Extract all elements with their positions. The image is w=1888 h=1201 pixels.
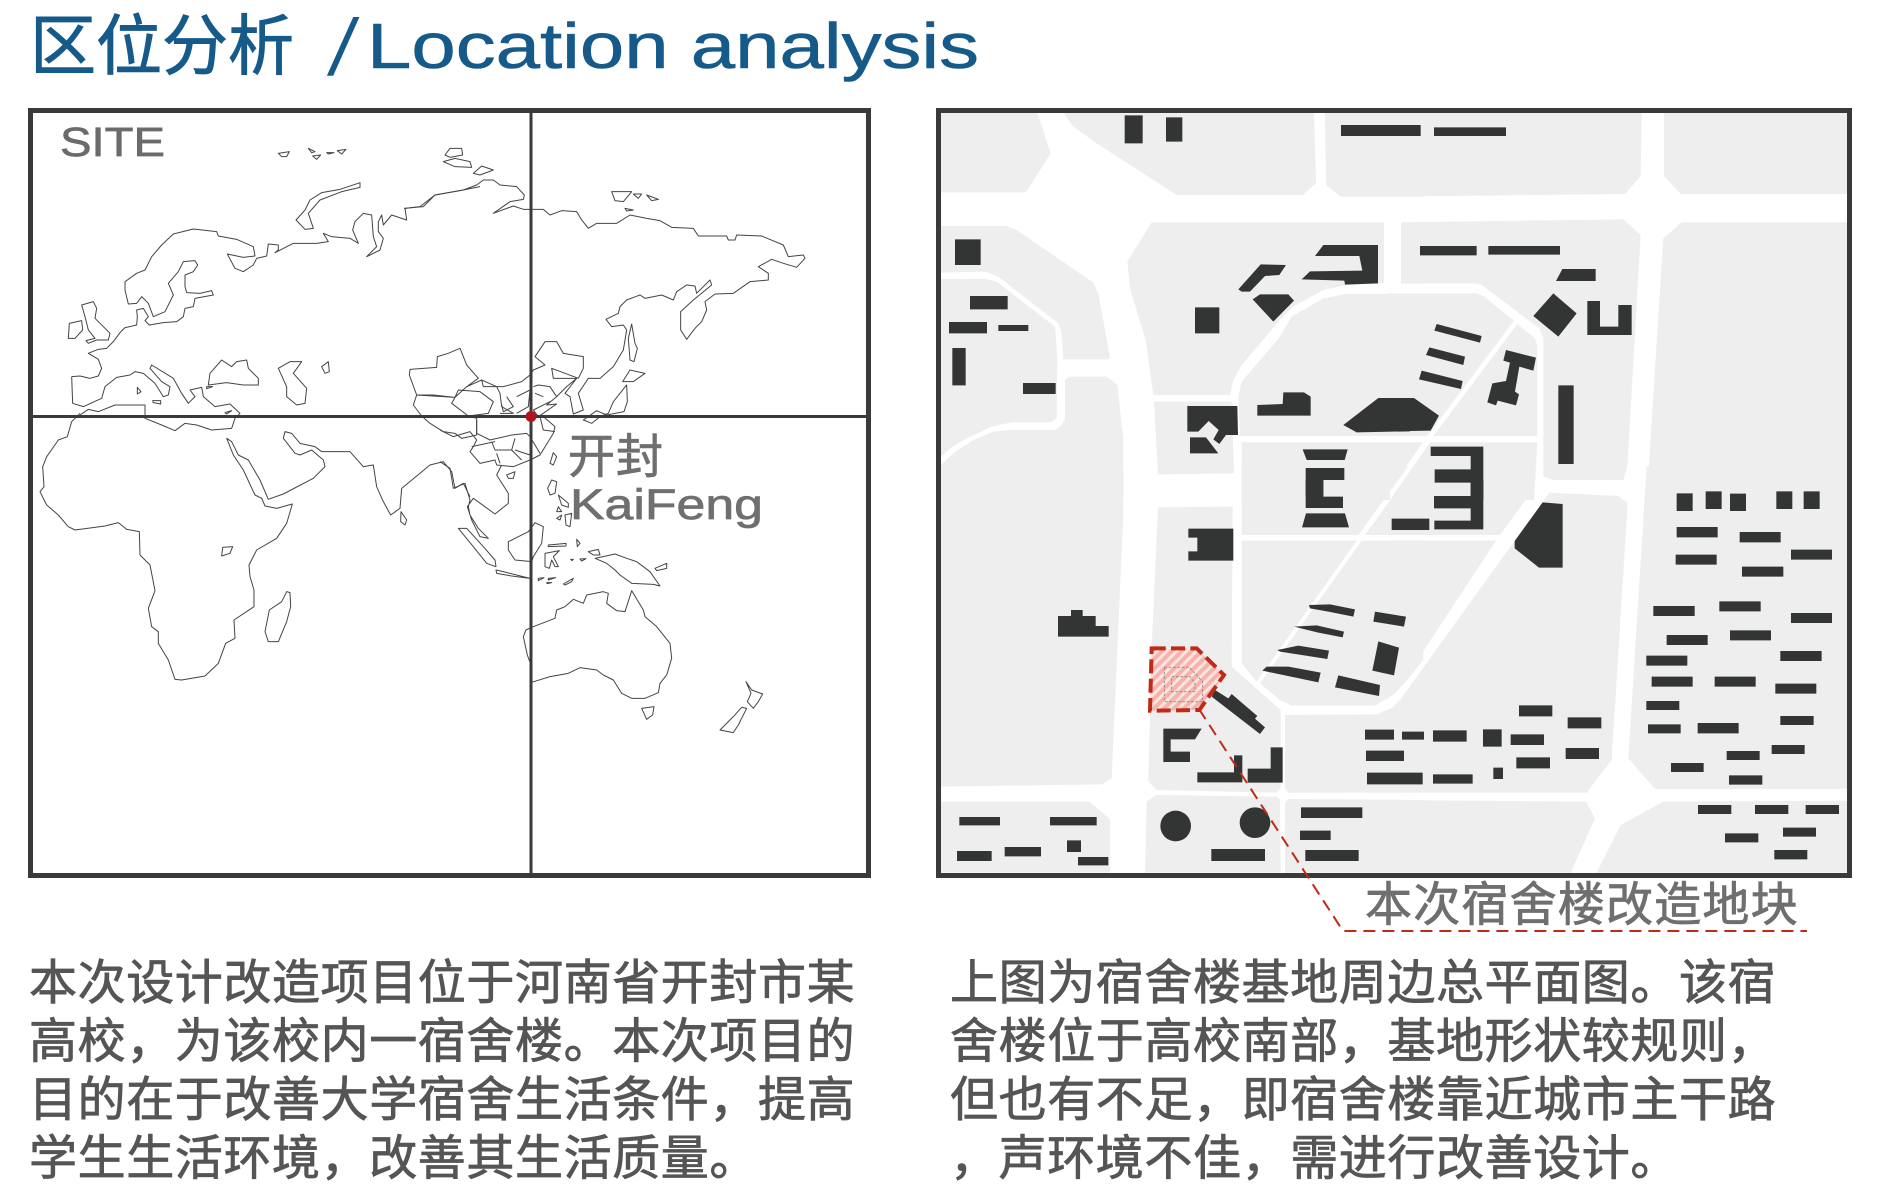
text block: site description: 舍楼位于高校南部，基地形状较规则， (950, 1016, 1776, 1068)
site label: 本次宿舍楼改造地块 (1365, 878, 1799, 931)
crosshair lines (30, 110, 869, 876)
site plan blocks and buildings (941, 113, 1847, 873)
text block: project description (29, 957, 855, 1186)
title: 区位分析 (30, 9, 294, 83)
world map outline (40, 148, 805, 733)
text block: site description: 但也有不足，即宿舍楼靠近城市主干路 (950, 1074, 1776, 1127)
text block: project description: 目的在于改善大学宿舍生活条件，提高 (29, 1074, 855, 1127)
panel: world location map (30, 110, 869, 876)
site highlight: dormitory plot (1150, 648, 1224, 711)
map frame (938, 110, 1850, 876)
buildings: north-west (949, 115, 1410, 497)
north asia, china and japan (404, 148, 805, 438)
africa and south asia coast (40, 413, 470, 680)
leader line to site label (1199, 709, 1807, 931)
text block: site description: ，声环境不佳，需进行改善设计。 (950, 1132, 1679, 1186)
europe and western russia coast (68, 148, 480, 431)
buildings: north-east (1393, 125, 1632, 500)
title (30, 4, 979, 93)
text block: project description: 本次设计改造项目位于河南省开封市某 (29, 957, 855, 1010)
text block: project description: 高校，为该校内一宿舍楼。本次项目的 (29, 1016, 855, 1068)
buildings: south-east (1433, 480, 1839, 859)
text block: project description: 学生生活环境，改善其生活质量。 (29, 1132, 758, 1186)
city blocks (941, 113, 1847, 873)
title: / (324, 4, 362, 93)
label: Kaifeng (568, 430, 763, 529)
map frame (30, 110, 868, 876)
text block: site description (950, 957, 1776, 1186)
panel: site plan (938, 110, 1850, 876)
location marker: Kaifeng (526, 411, 536, 422)
label: Kaifeng: KaiFeng (570, 481, 763, 529)
buildings: south-west (957, 480, 1429, 865)
text block: site description: 上图为宿舍楼基地周边总平面图。该宿 (950, 957, 1776, 1010)
title: Location analysis (367, 10, 979, 82)
site label: SITE (60, 119, 165, 165)
label: Kaifeng: 开封 (568, 430, 664, 483)
southeast asia, australia and oceania (440, 417, 763, 733)
